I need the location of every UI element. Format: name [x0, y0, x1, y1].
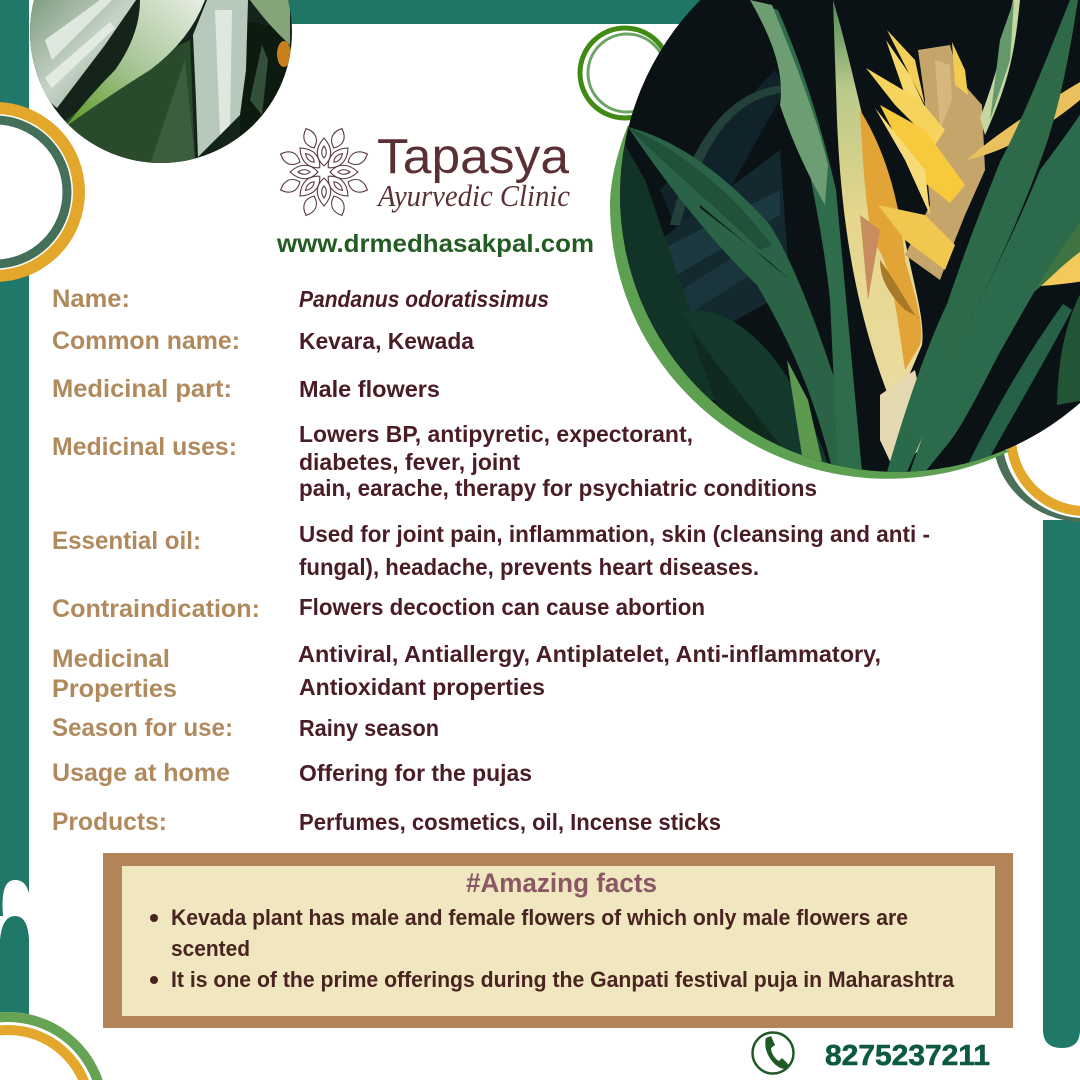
- row: name: Name:: [52, 285, 130, 313]
- logo: Tapasya Ayurvedic Clinic: [278, 126, 570, 218]
- row: common name: [52, 327, 474, 355]
- logo wordmark: Tapasya: [377, 130, 570, 184]
- logo subtitle: Ayurvedic Clinic: [376, 178, 570, 213]
- row: products: [52, 808, 721, 836]
- centre narrow leaf: [750, 0, 862, 472]
- row: medicinal part: Male flowers: [299, 376, 440, 402]
- photo: pandanus flower: [600, 0, 1080, 490]
- phone number: 8275237211: [825, 1040, 990, 1072]
- row: usage at home: Usage at home: [52, 759, 230, 787]
- row: contraindication: Flowers decoction can cause abortion: [299, 594, 705, 620]
- panel: plant details table: [52, 285, 930, 836]
- row: essential oil: Used for joint pain, inflammation, skin (cleansing and anti -: [299, 521, 930, 547]
- panel: amazing facts: [103, 853, 1013, 1028]
- row: essential oil: fungal), headache, prevents heart diseases.: [299, 554, 759, 580]
- ring: right green and gold: [993, 352, 1080, 522]
- row: medicinal properties: Antioxidant properties: [299, 674, 545, 700]
- row: products: Products:: [52, 808, 167, 836]
- row: essential oil: Essential oil:: [52, 527, 201, 555]
- row: contraindication: [52, 594, 705, 623]
- row: medicinal part: [52, 375, 440, 403]
- website url: www.drmedhasakpal.com: [276, 230, 594, 258]
- row: common name: Common name:: [52, 327, 240, 355]
- ring: bottom left green and gold: [0, 1012, 103, 1080]
- icon: phone: [752, 1032, 794, 1074]
- row: products: Perfumes, cosmetics, oil, Incense sticks: [299, 809, 721, 835]
- row: medicinal properties: Medicinal: [52, 645, 170, 673]
- row: medicinal uses: pain, earache, therapy for psychiatric conditions: [299, 475, 817, 501]
- row: essential oil: [52, 521, 930, 580]
- photo: pandanus leaves top left: [30, 0, 292, 163]
- fact one: scented: [171, 936, 250, 961]
- small lower leaf: [787, 360, 822, 462]
- row: medicinal uses: Medicinal uses:: [52, 433, 237, 461]
- green crescent behind photo: [610, 125, 1010, 479]
- row: name: [52, 285, 549, 313]
- row: season: Rainy season: [299, 715, 439, 741]
- fact one: [150, 905, 908, 961]
- row: name: Pandanus odoratissimus: [299, 286, 549, 312]
- fact two: It is one of the prime offerings during the Ganpati festival puja in Maharashtra: [171, 967, 955, 992]
- row: contraindication: Contraindication:: [52, 595, 260, 623]
- heading: #Amazing facts: [466, 868, 657, 898]
- ring: small top green: [580, 28, 670, 118]
- row: medicinal properties: [52, 641, 881, 703]
- row: medicinal properties: Properties: [52, 675, 177, 703]
- left sweeping leaf: [628, 127, 863, 472]
- row: season: [52, 714, 439, 742]
- row: usage at home: [52, 759, 532, 787]
- row: medicinal part: Medicinal part:: [52, 375, 232, 403]
- row: medicinal uses: diabetes, fever, joint: [299, 449, 520, 475]
- panel: large plant photograph: [600, 0, 1080, 490]
- ring: left gold and green: [0, 108, 79, 276]
- big right leaves: [1034, 223, 1080, 292]
- yellow bracts: [887, 30, 925, 105]
- row: common name: Kevara, Kewada: [299, 328, 474, 354]
- row: medicinal uses: [52, 421, 817, 501]
- row: usage at home: Offering for the pujas: [299, 760, 532, 786]
- pollen spike: [905, 45, 985, 280]
- icon: lotus mandala: [278, 126, 370, 218]
- cream yellow sheath: [833, 0, 923, 395]
- row: medicinal uses: Lowers BP, antipyretic, expectorant,: [299, 421, 693, 447]
- row: season: Season for use:: [52, 714, 233, 742]
- fact one: Kevada plant has male and female flowers of which only male flowers are: [171, 905, 908, 930]
- row: medicinal properties: Antiviral, Antiallergy, Antiplatelet, Anti-inflammatory,: [298, 641, 881, 667]
